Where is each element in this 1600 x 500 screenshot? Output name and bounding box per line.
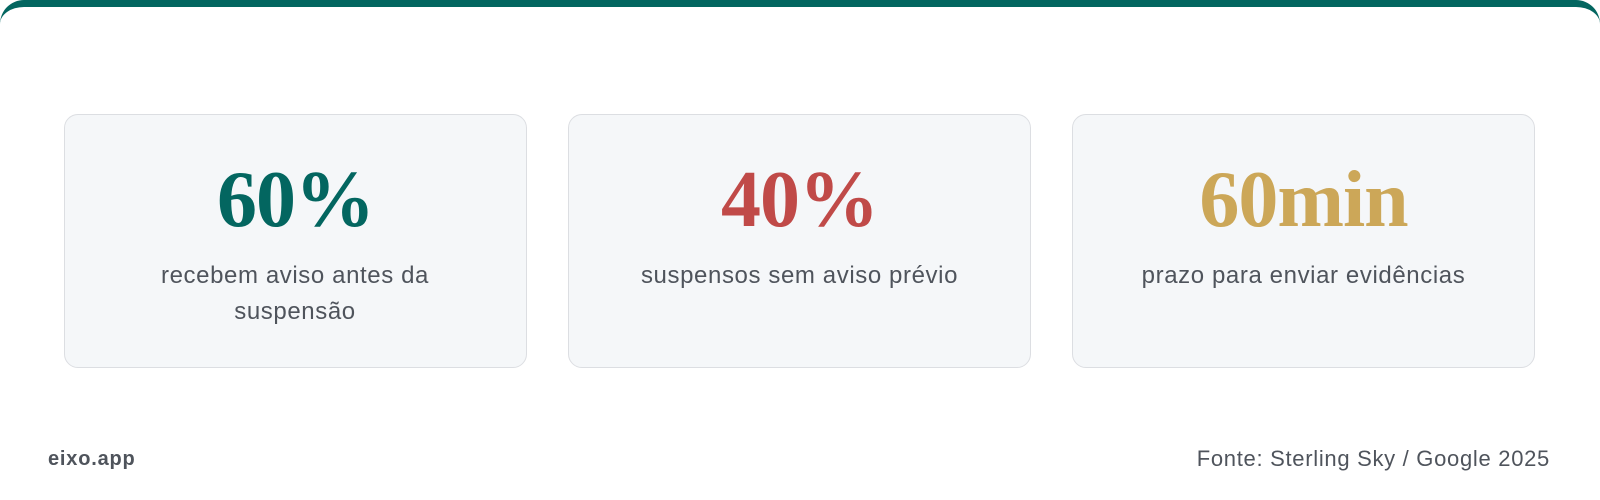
stat: 60min: 60min (1199, 156, 1408, 244)
card: 60% (64, 114, 527, 368)
label: 60min: prazo para enviar evidências (1142, 262, 1465, 289)
footer brand: eixo.app (48, 448, 136, 470)
card: 40% (568, 114, 1031, 368)
label: 40%: suspensos sem aviso prévio (641, 262, 958, 289)
label: 60%: recebem aviso antes da suspensão (161, 262, 429, 325)
stat: 60%: 60% (217, 156, 374, 244)
footer source: Fonte: Sterling Sky / Google 2025 (1197, 446, 1550, 471)
card: 60min (1072, 114, 1535, 368)
stat: 40%: 40% (721, 156, 878, 244)
